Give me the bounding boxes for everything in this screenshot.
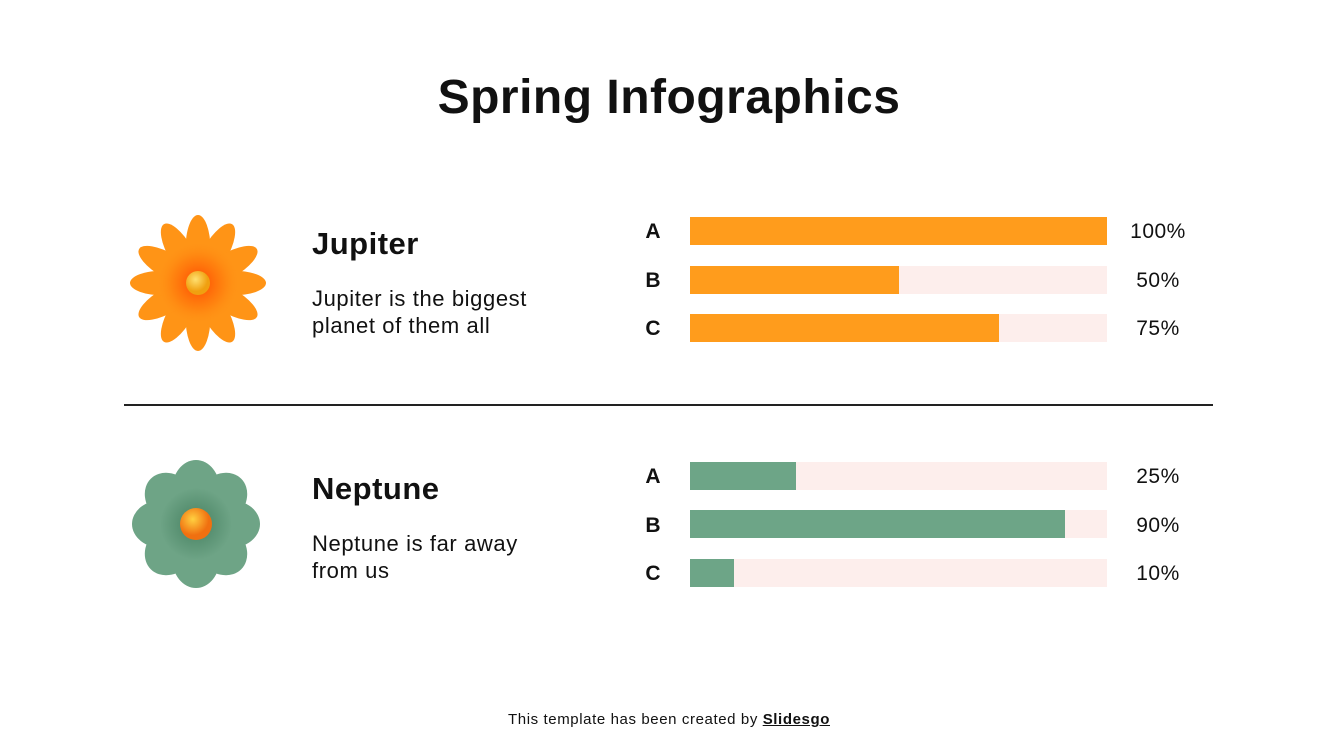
bar chart: Neptune: 25% — [1136, 465, 1180, 488]
bar chart: Jupiter: 100% — [1130, 220, 1186, 243]
bar chart: Neptune: 10% — [1136, 562, 1180, 585]
text: Jupiter description: Jupiter is the biggest — [312, 286, 527, 311]
bar chart: Jupiter: A — [645, 220, 661, 243]
text: Neptune description: from us — [312, 558, 390, 583]
text: Jupiter description: planet of them all — [312, 313, 490, 338]
bar chart: Jupiter: C — [645, 317, 661, 340]
text: Jupiter description — [312, 286, 527, 338]
bar chart: Neptune: C — [645, 562, 661, 585]
bar chart: Neptune — [645, 462, 1180, 587]
bar chart: Jupiter — [645, 217, 1186, 342]
text: Neptune description — [312, 531, 518, 583]
text: Neptune description: Neptune is far away — [312, 531, 518, 556]
footer credit: This template has been created by Slidesgo — [508, 711, 830, 728]
bar chart: Neptune: B — [645, 514, 661, 537]
heading: Neptune: Neptune — [312, 471, 440, 506]
bar chart: Jupiter: B — [645, 269, 661, 292]
heading: Jupiter: Jupiter — [312, 226, 419, 261]
bar chart: Neptune: A — [645, 465, 661, 488]
bar chart: Jupiter: 50% — [1136, 269, 1180, 292]
bar chart: Jupiter: 75% — [1136, 317, 1180, 340]
bar chart: Neptune: 90% — [1136, 514, 1180, 537]
icon: orange flower — [130, 215, 266, 351]
icon: green flower — [132, 460, 260, 588]
title: Spring Infographics — [438, 71, 900, 124]
